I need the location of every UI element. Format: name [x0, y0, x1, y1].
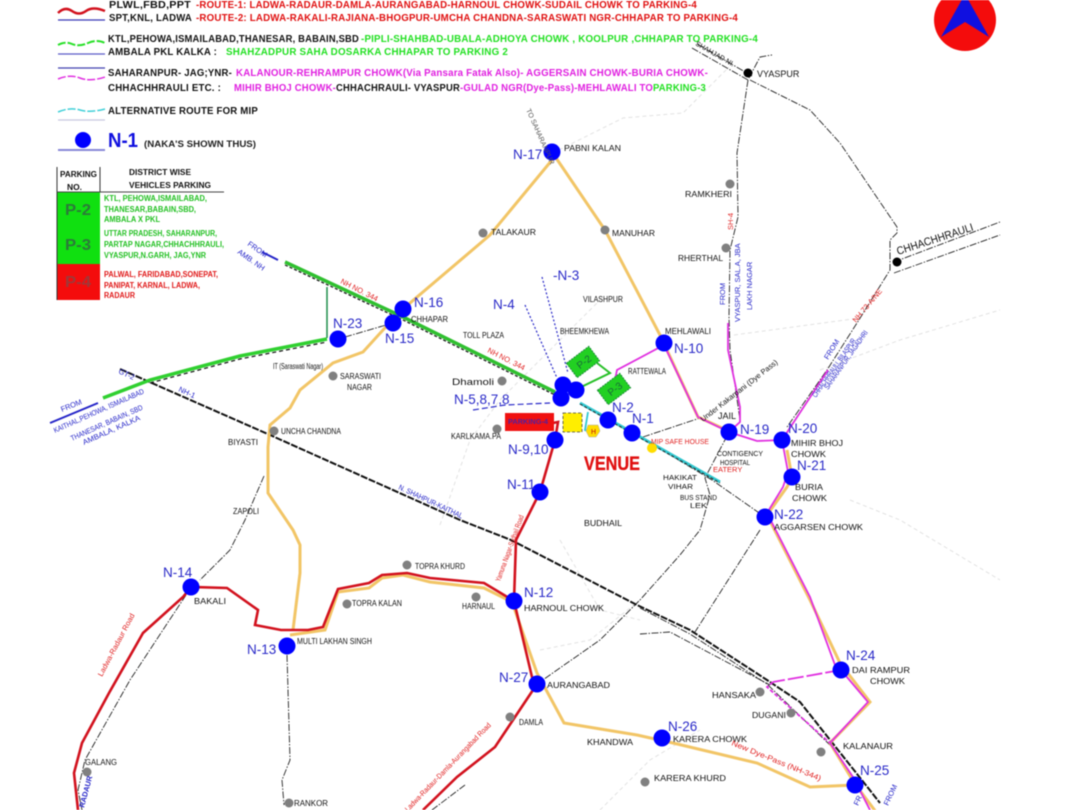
- annotation: from saharanpur and vyaspur: FROM: [882, 783, 899, 807]
- place labels: GALANG: [85, 758, 117, 767]
- legend: [58, 0, 758, 152]
- place labels: DAI RAMPUR: [852, 666, 910, 675]
- annotation: highway names: N. SHAHPUR-KAITHAL: [397, 483, 464, 520]
- place labels: PABNI KALAN: [564, 144, 621, 153]
- annotation: from Kaithal direction: FROM: [59, 397, 83, 414]
- parking 2 block: [566, 346, 600, 378]
- annotation: from saharanpur and vyaspur: [77, 243, 899, 809]
- place labels: SARASWATI: [340, 372, 381, 381]
- place labels: IT (Saraswati Nagar): [273, 362, 323, 371]
- legend: -ROUTE-2: LADWA-RAKALI-RAJIANA-BHOGPUR-UMCHA CHANDNA-SARASWATI NGR-CHHAPAR TO PARKING-4: [196, 13, 738, 24]
- place labels: TOPRA KALAN: [352, 599, 402, 608]
- towns: major dots: [744, 68, 902, 266]
- naka labels: N-24: [846, 648, 876, 663]
- place labels: UNCHA CHANDNA: [281, 427, 342, 436]
- place labels: HAKIKAT: [663, 475, 698, 482]
- place labels: JAIL: [718, 411, 736, 421]
- annotation: highway names: NH NO. 344: [486, 346, 527, 372]
- place labels: MEHLAWALI: [665, 327, 711, 336]
- road and direction annotations: [50, 213, 899, 810]
- place labels: MIHIR BHOJ: [791, 439, 843, 448]
- naka labels: N-13: [247, 642, 276, 657]
- legend: MIHIR BHOJ CHOWK-: [234, 83, 336, 94]
- venue area: MIP SAFE HOUSE: [651, 437, 709, 446]
- place labels: VILASHPUR: [583, 295, 623, 304]
- helipad: [586, 425, 600, 437]
- naka markers: [182, 144, 864, 794]
- place labels: DUGANI: [752, 711, 786, 720]
- naka labels: N-1: [632, 411, 654, 426]
- place labels: KALANAUR: [843, 742, 893, 751]
- venue area: PARKING-4: [508, 417, 549, 426]
- naka labels: N-10: [674, 341, 703, 356]
- naka labels: N-27: [499, 670, 528, 685]
- place labels: KARERA CHOWK: [673, 735, 748, 744]
- parking table: THANESAR,BABAIN,SBD,: [104, 205, 196, 214]
- place labels: CONTIGENCY: [717, 451, 763, 458]
- legend: ambala group: AMBALA PKL KALKA :: [108, 47, 217, 58]
- legend: CHHACHRAULI- VYASPUR: [336, 83, 461, 94]
- legend: N-1: [108, 130, 138, 152]
- place labels: CHHACHHRAULI: [895, 222, 975, 258]
- place labels: NAGAR: [347, 383, 372, 392]
- parking table: VEHICLES PARKING: [129, 181, 211, 190]
- place labels: BIYASTI: [228, 438, 258, 447]
- place labels: HOSPITAL: [720, 460, 750, 467]
- venue block: [563, 413, 582, 432]
- venue area: [505, 346, 709, 475]
- place labels: SHAHJAD NI.: [694, 41, 735, 69]
- annotation: from saharanpur and vyaspur: RADAUR: [77, 774, 94, 809]
- parking table: P-4: [65, 274, 91, 291]
- parking table: AMBALA X PKL: [104, 215, 160, 224]
- parking 2 districts: KTL, PEHOWA,ISMAILABAD,: [104, 194, 207, 203]
- annotation: from Kaithal direction: KAITHAL,PEHOWA, ISMAILABAD: [52, 387, 146, 435]
- naka labels: N-5,8,7,8: [454, 392, 510, 407]
- place labels: CHOWK: [792, 494, 828, 503]
- place labels: VYASPUR: [757, 69, 800, 79]
- parking 3 districts: UTTAR PRADESH, SAHARANPUR,: [104, 229, 217, 238]
- place labels: TALAKAUR: [491, 228, 536, 237]
- place labels: HANSAKA: [712, 691, 757, 700]
- place labels: RHERTHAL: [678, 254, 724, 263]
- place labels: LEK: [690, 503, 707, 510]
- legend: alternative route: ALTERNATIVE ROUTE FOR MIP: [108, 106, 258, 117]
- annotation: highway names: [96, 213, 884, 810]
- route: yellow parking route: [268, 152, 876, 810]
- place labels: RAMKHERI: [685, 190, 732, 199]
- legend: SHAHZADPUR SAHA DOSARKA CHHAPAR TO PARKING 2: [226, 47, 508, 58]
- annotation: highway names: NH-1: [177, 385, 197, 400]
- place labels: HARNAUL: [462, 602, 495, 611]
- annotation: from saharanpur and vyaspur: CHHACHHRAULI, BILASPUR: [810, 336, 858, 399]
- towns: dots: [82, 180, 826, 808]
- place labels: MULTI LAKHAN SINGH: [297, 637, 372, 646]
- naka labels: N-11: [507, 477, 535, 492]
- place labels: Dhamoli: [452, 377, 494, 387]
- legend: route 2: SPT,KNL, LADWA: [109, 13, 192, 24]
- place labels: MANUHAR: [612, 229, 655, 238]
- place labels: [85, 41, 975, 808]
- place labels: VIHAR: [668, 484, 693, 491]
- annotation: from Kaithal direction: THANESAR, BABAIN, SBD: [69, 403, 145, 443]
- annotation: highway names: NH 73-A/NE: [851, 287, 884, 324]
- parking table: VYASPUR,N.GARH, JAG,YNR: [104, 251, 206, 260]
- place labels: BAKALI: [194, 597, 226, 606]
- naka labels: N-14: [163, 565, 193, 580]
- parking 3 block: [597, 373, 631, 405]
- place labels: ZAPOLI: [233, 507, 259, 516]
- directional arrows for nakas: [473, 277, 568, 410]
- place labels: TOPRA KHURD: [415, 562, 465, 571]
- parking table: P-3: [65, 237, 91, 254]
- place labels: AURANGABAD: [547, 681, 610, 690]
- naka labels: N-25: [860, 763, 889, 778]
- annotation: highway names: SH-4: [726, 213, 735, 230]
- place labels: HARNOUL CHOWK: [524, 604, 605, 613]
- annotation: highway names: GT-2: [117, 367, 136, 382]
- annotation: from saharanpur and vyaspur: FR: [852, 793, 864, 807]
- parking table: NO.: [67, 183, 82, 192]
- annotation: highway names: Yamuna Nagar-Sudhail Road: [493, 514, 526, 583]
- parking table: PARTAP NAGAR,CHHACHHRAULI,: [104, 240, 224, 249]
- route: magenta route 3: [615, 323, 870, 810]
- place labels: BHEEMKHEWA: [560, 327, 610, 336]
- annotation: from ambala: [236, 239, 278, 273]
- naka labels: N-12: [524, 585, 553, 600]
- parking 3 block: P-3: [606, 380, 625, 399]
- parking table: [57, 167, 224, 300]
- naka labels: [163, 147, 889, 778]
- place labels: KHANDWA: [587, 738, 634, 747]
- place labels: BURIA: [795, 483, 824, 492]
- place labels: CHOWK: [791, 450, 827, 459]
- venue label: VENUE: [584, 454, 640, 475]
- legend: PARKING-3: [653, 83, 706, 94]
- legend: -ROUTE-1: LADWA-RADAUR-DAMLA-AURANGABAD-HARNOUL CHOWK-SUDAIL CHOWK TO PARKING-4: [196, 0, 697, 11]
- legend: -GULAD NGR(Dye-Pass)-MEHLAWALI TO: [460, 83, 653, 94]
- annotation: from saharanpur and vyaspur: FROM: [822, 338, 841, 361]
- venue area: H: [591, 429, 596, 436]
- route: green route 2: [103, 262, 610, 398]
- annotation: from ambala: FROM: [246, 239, 269, 259]
- place labels: DAMLA: [519, 718, 544, 727]
- annotation: from Kaithal direction: AMBALA, KALKA: [81, 413, 141, 447]
- annotation: from saharanpur and vyaspur: SAHARANPUR, JAGADHRI: [822, 329, 870, 391]
- annotation: from saharanpur and vyaspur: FROM: [718, 283, 727, 305]
- parking table: RADAUR: [104, 291, 135, 300]
- MIP safe house marker: [647, 443, 657, 453]
- annotation: from saharanpur and vyaspur: VYASPUR, SAL.A, JBA: [733, 243, 742, 322]
- parking codes: P-2: [65, 202, 91, 219]
- naka labels: N-22: [774, 507, 803, 522]
- place labels: Under Kakarpani (Dye Pass): [699, 357, 780, 424]
- naka labels: N-23: [333, 316, 362, 331]
- place labels: RATTEWALA: [628, 367, 667, 376]
- naka labels: N-9,10: [508, 442, 549, 457]
- annotation: from Kaithal direction: [50, 387, 146, 447]
- legend: naka marker: [75, 132, 91, 148]
- annotation: highway names: NH NO. 344: [339, 277, 380, 303]
- legend: (NAKA'S SHOWN THUS): [144, 139, 256, 149]
- legend: route 1: PLWL,FBD,PPT: [109, 0, 191, 11]
- route: red route 1: [74, 422, 558, 810]
- annotation: highway names: Ladwa-Radaur Road: [96, 612, 137, 678]
- place labels: RANKOR: [294, 799, 328, 808]
- table header: PARKING: [60, 170, 97, 179]
- annotation: from ambala: AMB. NH: [236, 247, 267, 273]
- naka labels: N-2: [612, 400, 634, 415]
- place labels: TO SAHARANPUR: [524, 108, 555, 166]
- place labels: BUDHAIL: [584, 519, 623, 528]
- naka labels: N-19: [740, 422, 769, 437]
- parking 2 block: P-2: [575, 353, 594, 372]
- place labels: BUS STAND: [680, 495, 717, 502]
- place labels: CHOWK: [870, 677, 906, 686]
- place labels: AGGARSEN CHOWK: [774, 523, 864, 532]
- annotation: highway names: New Dye-Pass (NH-344): [730, 739, 823, 783]
- legend: -PIPLI-SHAHBAD-UBALA-ADHOYA CHOWK , KOOLPUR ,CHHAPAR TO PARKING-4: [361, 34, 758, 45]
- naka labels: N-21: [797, 458, 826, 473]
- legend: saharanpur group: SAHARANPUR- JAG;YNR-: [108, 68, 232, 79]
- legend: kaithal group: KTL,PEHOWA,ISMAILABAD,THANESAR, BABAIN,SBD: [108, 34, 359, 45]
- naka labels: -N-3: [553, 268, 579, 283]
- route: cyan alternative route: [580, 403, 720, 483]
- naka labels: N-26: [668, 719, 697, 734]
- place labels: TOLL PLAZA: [463, 331, 505, 340]
- naka labels: N-4: [493, 297, 515, 312]
- parking 4 districts: PALWAL, FARIDABAD,SONEPAT,: [104, 270, 218, 279]
- naka labels: N-20: [788, 421, 817, 436]
- parking 4 block: [505, 413, 554, 431]
- place labels: KARERA KHURD: [654, 774, 726, 783]
- icon: north compass: [934, 0, 996, 51]
- naka labels: N-16: [414, 295, 443, 310]
- annotation: highway names: EATERY: [713, 465, 742, 474]
- naka labels: N-15: [385, 331, 414, 346]
- place labels: CHHAPAR: [411, 315, 448, 324]
- parking table: PANIPAT, KARNAL, LADWA,: [104, 281, 200, 290]
- legend: chhachhrauli group: CHHACHHRAULI ETC. :: [108, 83, 221, 94]
- naka labels: N-17: [513, 147, 542, 162]
- legend: swatches: [58, 8, 105, 150]
- legend: KALANOUR-REHRAMPUR CHOWK(Via Pansara Fatak Also)- AGGERSAIN CHOWK-BURIA CHOWK-: [236, 68, 708, 79]
- place labels: KARLKAMA.PA: [451, 432, 502, 441]
- parking table: DISTRICT WISE: [129, 168, 192, 177]
- annotation: from saharanpur and vyaspur: LAKH NAGAR: [745, 261, 754, 310]
